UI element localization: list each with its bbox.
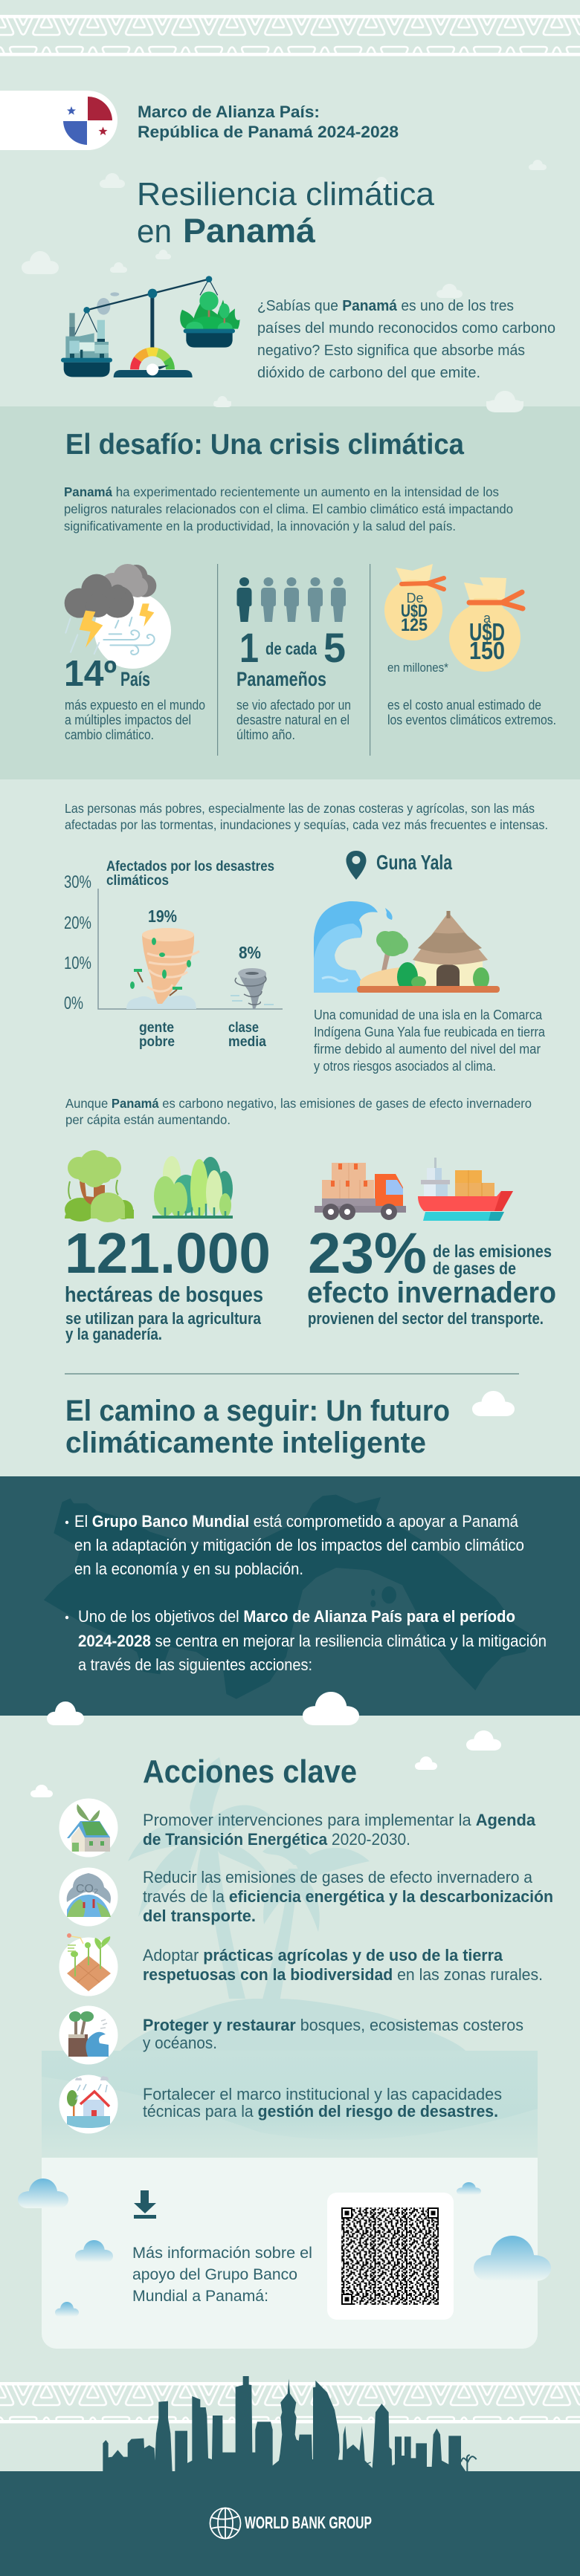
icon: cloud	[472, 1391, 515, 1416]
stat: 14º País: 14º	[64, 654, 117, 694]
intro text	[257, 297, 555, 381]
action text: Reducir las emisiones de gases de efecto invernadero a	[143, 1868, 533, 1886]
bar icon: grey tornado	[231, 968, 274, 1009]
y axis labels: 20%	[64, 913, 91, 933]
bullet list: Grupo Banco Mundial	[65, 1512, 524, 1578]
heading: el camino a seguir: El camino a seguir: Un futuro	[65, 1395, 450, 1427]
icon: download	[134, 2190, 156, 2219]
action 3: agriculture	[59, 1933, 543, 1996]
heading: el camino a seguir: climáticamente inteligente	[65, 1427, 426, 1459]
logo: World Bank Group: WORLD BANK GROUP	[245, 2513, 372, 2532]
right pan	[186, 333, 233, 348]
stat: 23% efecto invernadero	[307, 1222, 556, 1328]
icon: money bag large: 150	[469, 637, 505, 664]
stat: 1 de cada 5: se vio afectado por un	[236, 698, 351, 713]
action text: y océanos.	[143, 2034, 217, 2052]
icon: CO2 cloud and globe	[59, 1868, 117, 1926]
icon: coastal erosion	[59, 2006, 117, 2064]
title: en	[137, 213, 172, 250]
stat: 23% efecto invernadero: de las emisiones	[433, 1242, 552, 1261]
text: Guna Yala	[314, 1007, 546, 1074]
stat: 121.000 hectáreas: se utilizan para la agricultura	[65, 1309, 262, 1328]
action text: Proteger y restaurar bosques, ecosistemas costeros	[143, 2016, 523, 2034]
icon: money bag small	[384, 564, 444, 640]
panel: more information	[42, 2051, 538, 2349]
title: Panamá	[183, 212, 316, 250]
globe	[210, 2508, 241, 2538]
icon: money bag large: a	[483, 611, 492, 626]
title	[137, 176, 435, 250]
stat: 14º País: País	[120, 668, 150, 690]
text: más información: Más información sobre el	[132, 2245, 312, 2262]
stat: costo anual: en millones*	[387, 661, 448, 675]
chart title	[106, 859, 274, 889]
bullet list: Marco de Alianza País: 2024-2028 se centra en mejorar la resiliencia climática y la mitigación	[78, 1632, 547, 1650]
bullet list: Marco de Alianza País: Uno de los objetivos del Marco de Alianza País para el período	[78, 1607, 515, 1626]
icon: money bag small: U$D	[401, 601, 428, 621]
left pan	[64, 363, 110, 377]
chart: afectados por los desastres climáticos	[64, 859, 283, 1050]
action 1: energy transition	[59, 1798, 536, 1858]
bullet list: Grupo Banco Mundial: en la adaptación y mitigación de los impactos del cambio climático	[74, 1536, 524, 1554]
paragraph: Panamá ha experimentado: peligros naturales relacionados con el clima. El cambio climático está impactando	[64, 502, 513, 516]
icon: farm plot	[59, 1933, 117, 1996]
stat: costo anual: es el costo anual estimado de	[387, 698, 541, 713]
category labels: media	[228, 1034, 266, 1050]
action text	[143, 1811, 536, 1849]
category labels: pobre	[139, 1034, 175, 1050]
Panama City skyline	[103, 2376, 477, 2472]
heading: Guna Yala: Guna Yala	[376, 851, 452, 874]
chart title: Afectados por los desastres	[106, 859, 274, 875]
subtitle: Marco de Alianza País: Marco de Alianza País:	[138, 103, 320, 121]
beam	[87, 279, 209, 310]
stat dividers	[217, 564, 370, 756]
subtitle: Marco de Alianza País	[138, 103, 399, 141]
bullet list: Grupo Banco Mundial: El Grupo Banco Mundial está comprometido a apoyar a Panamá	[74, 1512, 519, 1531]
gauge base	[114, 370, 193, 377]
gauge	[135, 351, 170, 369]
stat: 121.000 hectáreas	[65, 1222, 271, 1343]
section divider	[65, 1373, 519, 1375]
value labels: 8%	[239, 943, 261, 962]
flag pill	[0, 91, 117, 150]
text: Guna Yala: Una comunidad de una isla en la Comarca	[314, 1007, 543, 1022]
action text	[143, 1946, 543, 1984]
map of Panama silhouette	[44, 1495, 535, 1699]
clouds: actions section	[30, 1692, 501, 1797]
intro text: negativo? Esto significa que absorbe más	[257, 342, 525, 359]
palm fronds right	[262, 1843, 316, 1865]
y axis labels: 0%	[64, 993, 83, 1013]
bullet list: Marco de Alianza País: a través de las siguientes acciones:	[78, 1655, 312, 1674]
action text: técnicas para la gestión del riesgo de desastres.	[143, 2102, 498, 2121]
paragraph: las personas más pobres	[65, 801, 548, 832]
text: más información: Mundial a Panamá:	[132, 2288, 268, 2305]
stat: 14º País: más expuesto en el mundo	[65, 698, 205, 713]
action text: Promover intervenciones para implementar la Agenda	[143, 1811, 536, 1829]
text: más información: apoyo del Grupo Banco	[132, 2266, 297, 2283]
action text: través de la eficiencia energética y la descarbonización	[143, 1887, 553, 1906]
paragraph: Panamá ha experimentado: Panamá ha experimentado recientemente un aumento en la intensidad de los	[64, 484, 499, 499]
axes	[98, 889, 283, 1009]
icon: flooded house	[59, 2074, 117, 2134]
clouds: blue gradient	[18, 2178, 551, 2317]
action 5: disaster risk	[59, 2074, 502, 2134]
text: más información	[132, 2245, 312, 2305]
bullet list: Marco de Alianza País	[65, 1607, 547, 1674]
intro text: países del mundo reconocidos como carbono	[257, 319, 555, 337]
icon: forest	[152, 1156, 233, 1219]
action text	[143, 2085, 502, 2121]
paragraph: Aunque Panamá: per cápita están aumentando.	[65, 1112, 231, 1127]
action 2: emissions	[59, 1868, 553, 1926]
action text: Adoptar prácticas agrícolas y de uso de la tierra	[143, 1946, 503, 1965]
heading: el desafío: El desafío: Una crisis climática	[65, 429, 464, 461]
bar icon: orange tornado	[126, 928, 199, 1009]
y axis labels: 10%	[64, 953, 91, 973]
footer	[0, 2471, 580, 2576]
y axis labels: 30%	[64, 872, 91, 892]
action text: del transporte.	[143, 1907, 256, 1925]
top patterned band	[0, 15, 580, 56]
stat: 23% efecto invernadero: efecto invernadero	[307, 1276, 556, 1309]
icon: map pin	[347, 851, 366, 880]
action text: de Transición Energética 2020-2030.	[143, 1830, 410, 1849]
text: Guna Yala: y otros riesgos asociados al clima.	[314, 1058, 496, 1074]
stat: 1 de cada 5: Panameños	[236, 668, 326, 690]
stat: costo anual: los eventos climáticos extremos.	[387, 713, 556, 727]
icon: money bag small: De	[406, 591, 424, 606]
paragraph: Aunque Panamá: Aunque Panamá es carbono negativo, las emisiones de gases de efecto invernadero	[65, 1096, 532, 1111]
stat: 14º País: cambio climático.	[65, 727, 154, 742]
QR code	[327, 2193, 454, 2320]
action text	[143, 2016, 523, 2052]
stat: 1 de cada 5	[236, 624, 351, 742]
subtitle: Marco de Alianza País: República de Panamá 2024-2028	[138, 123, 399, 141]
clouds overlapping panel top	[214, 401, 523, 412]
stat: 14º País: a múltiples impactos del	[65, 713, 191, 727]
chart title: climáticos	[106, 873, 169, 889]
plants	[180, 299, 240, 329]
intro text: ¿Sabías que Panamá es uno de los tres	[257, 297, 514, 314]
bottom patterned band	[0, 2382, 580, 2424]
heading: acciones clave: Acciones clave	[143, 1753, 357, 1790]
stat: 14º País	[64, 654, 205, 742]
logo: World Bank Group	[210, 2508, 372, 2538]
title: Resiliencia climática	[137, 176, 435, 212]
icon: cargo ship	[418, 1158, 513, 1221]
island	[115, 1999, 468, 2066]
trunk right	[262, 1869, 299, 2002]
icon: money bag small: 125	[401, 615, 428, 635]
paragraph: Panamá ha experimentado	[64, 484, 513, 533]
stat: 1 de cada 5: último año.	[236, 727, 295, 742]
trunk left	[204, 1843, 245, 1999]
stat: 121.000 hectáreas: 121.000	[65, 1222, 271, 1285]
paragraph: Panamá ha experimentado: significativamente en la productividad, la innovación y la salud del país.	[64, 519, 456, 533]
stat: 23% efecto invernadero: de gases de	[433, 1259, 516, 1278]
heading: el camino a seguir	[65, 1395, 450, 1459]
intro text: dióxido de carbono del que emite.	[257, 364, 480, 381]
stat: 121.000 hectáreas: hectáreas de bosques	[65, 1283, 263, 1307]
post	[150, 293, 154, 349]
flag of Panama	[63, 97, 112, 145]
value labels: 19%	[148, 906, 177, 926]
icon: CO2 cloud and globe: CO₂	[76, 1883, 98, 1895]
icon: tree	[65, 1150, 134, 1222]
stat: 1 de cada 5: 1	[239, 624, 259, 671]
panel: el desafío	[0, 401, 580, 779]
text: Guna Yala: Indígena Guna Yala fue reubicada en tierra	[314, 1024, 546, 1039]
stat: 23% efecto invernadero: provienen del sector del transporte.	[308, 1309, 544, 1328]
action 4: ecosystems	[59, 2006, 523, 2064]
text: Guna Yala: firme debido al aumento del nivel del mar	[314, 1041, 541, 1057]
y axis labels	[64, 872, 91, 1013]
stat: 121.000 hectáreas: y la ganadería.	[65, 1325, 162, 1343]
value labels	[148, 906, 261, 962]
category labels: clase	[228, 1020, 259, 1036]
stat: 1 de cada 5: desastre natural en el	[236, 713, 349, 727]
palm fronds left	[190, 1757, 222, 1835]
stat: 23% efecto invernadero: 23%	[308, 1222, 427, 1285]
icon: balance scale with factory and forest	[61, 276, 240, 377]
icon: truck	[315, 1163, 406, 1220]
paragraph: Aunque Panamá	[65, 1096, 532, 1127]
strings	[75, 279, 218, 335]
action text: Fortalecer el marco institucional y las capacidades	[143, 2085, 502, 2103]
paragraph: las personas más pobres: afectadas por las tormentas, inundaciones y sequías, cada vez más frecuentes e intensas.	[65, 817, 548, 832]
icon: five people	[236, 577, 346, 622]
illustration: wave and hut	[314, 901, 500, 993]
icon: money bag large: U$D	[469, 618, 505, 646]
decorative clouds: header	[22, 160, 547, 412]
category labels	[139, 1020, 266, 1050]
stat: 1 de cada 5: de cada	[265, 639, 317, 658]
action text: respetuosas con la biodiversidad en las zonas rurales.	[143, 1965, 543, 1984]
stat: 1 de cada 5: 5	[323, 624, 346, 671]
palm trees and island watermark	[115, 1757, 468, 2066]
bullet list: Grupo Banco Mundial: en la economía y en su población.	[74, 1560, 303, 1578]
icon: solar house	[59, 1798, 117, 1858]
category labels: gente	[139, 1020, 174, 1036]
icon: money bag large	[449, 577, 523, 672]
icon: storm	[65, 564, 171, 669]
stat: costo anual	[387, 661, 556, 727]
paragraph: las personas más pobres: Las personas más pobres, especialmente las de zonas costeras y agrícolas, son las más	[65, 801, 535, 816]
factory	[69, 313, 75, 338]
action text	[143, 1868, 553, 1925]
panel: dark band with map	[0, 1476, 580, 1716]
